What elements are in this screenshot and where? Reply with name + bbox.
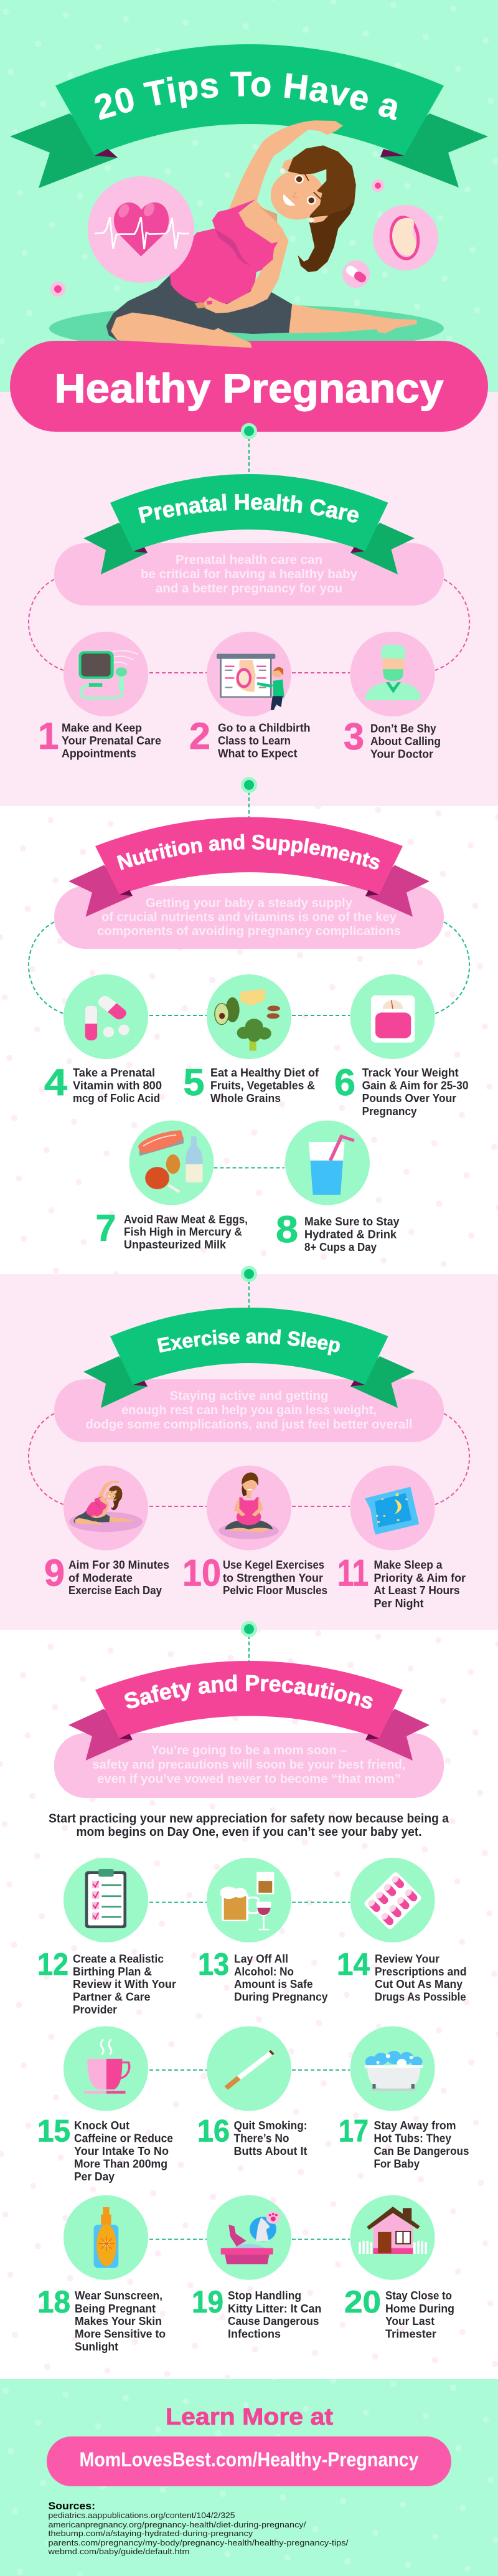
icon: checklist clipboard xyxy=(63,1858,148,1942)
number 7: 7 xyxy=(96,1207,116,1248)
tip 2 text xyxy=(218,721,310,760)
number 20: 20 xyxy=(344,2284,381,2319)
tip 11 text: Make Sleep a xyxy=(374,1559,443,1571)
tip 5 text: Whole Grains xyxy=(210,1092,281,1105)
description pill xyxy=(54,543,444,606)
tip 12 text xyxy=(73,1952,176,2016)
tip 9 text: Aim For 30 Minutes xyxy=(68,1559,169,1571)
number 15: 15 xyxy=(37,2113,70,2148)
tip 6 xyxy=(334,1062,469,1118)
description pill: and a better pregnancy for you xyxy=(156,582,342,596)
ribbon heading: Exercise and Sleep xyxy=(157,1329,340,1356)
ribbon heading xyxy=(68,1661,430,1761)
number 12: 12 xyxy=(37,1947,68,1982)
tip 2 text: Go to a Childbirth xyxy=(218,721,310,734)
tip 6 text: Track Your Weight xyxy=(362,1067,459,1079)
tip 8 xyxy=(276,1209,400,1253)
description pill: Staying active and getting xyxy=(169,1389,329,1403)
tip 6 text: Gain & Aim for 25-30 xyxy=(362,1080,469,1092)
sources: thebump.com/a/staying-hydrated-during-pregnancy xyxy=(49,2529,253,2538)
number 16: 16 xyxy=(197,2113,230,2148)
icon: weight scale xyxy=(350,974,435,1059)
tip 7 xyxy=(96,1207,248,1251)
intro text: mom begins on Day One, even if you can’t see your baby yet. xyxy=(76,1825,422,1839)
tip 17 text: Can Be Dangerous xyxy=(374,2145,469,2157)
icon: cigarette xyxy=(207,2026,291,2111)
tip 18 text: Sunlight xyxy=(75,2341,118,2353)
panel: nutrition and supplements xyxy=(27,817,471,1253)
icon: childbirth class xyxy=(207,632,291,716)
tip 10 xyxy=(182,1552,327,1597)
tip 3 text: About Calling xyxy=(370,735,441,748)
panel: exercise and sleep xyxy=(27,1308,471,1610)
tip 12 text: Create a Realistic xyxy=(73,1952,164,1965)
row connectors xyxy=(149,1903,350,2240)
tip 1 text: Appointments xyxy=(62,748,136,760)
icon: sunscreen bottle xyxy=(63,2195,148,2280)
tip 5 text: Eat a Healthy Diet of xyxy=(210,1067,319,1079)
tip 13 text: Lay Off All xyxy=(234,1952,288,1965)
ribbon heading xyxy=(83,474,415,574)
tip 13 text xyxy=(234,1952,327,2003)
tip 13 xyxy=(198,1947,327,2003)
tip 5 text xyxy=(210,1067,319,1105)
description pill: You’re going to be a mom soon – xyxy=(151,1744,347,1757)
tip 14 text: Drugs As Possible xyxy=(375,1991,466,2003)
icon: stretching woman xyxy=(63,1465,148,1550)
icon: healthy foods xyxy=(207,974,291,1059)
tip 19 text: Stop Handling xyxy=(228,2289,301,2302)
tip 1 text: Your Prenatal Care xyxy=(62,734,161,747)
number 8: 8 xyxy=(276,1209,298,1250)
icon: house xyxy=(350,2195,435,2280)
heart monitor bubble xyxy=(88,176,194,283)
ribbon heading: Prenatal Health Care xyxy=(138,493,359,523)
tip 4 text xyxy=(73,1067,162,1105)
icon: doctor xyxy=(350,632,435,716)
sources xyxy=(47,2500,349,2556)
yoga mat xyxy=(49,305,444,352)
tip 1 xyxy=(38,715,161,760)
tip 18 text: Makes Your Skin xyxy=(75,2315,162,2327)
tip 15 text: Knock Out xyxy=(74,2119,129,2132)
tip 10 text: Pelvic Floor Muscles xyxy=(223,1584,327,1597)
ring connector xyxy=(29,1414,469,1506)
tip 16 text xyxy=(234,2119,308,2157)
tip 12 text: Partner & Care xyxy=(73,1991,151,2003)
tip 10 text xyxy=(223,1559,327,1597)
tip 11 text: Per Night xyxy=(374,1597,423,1610)
embryo bubble xyxy=(373,205,438,270)
tip 20 text: Home During xyxy=(385,2303,454,2315)
number 19: 19 xyxy=(192,2284,223,2319)
tip 3 text: Your Doctor xyxy=(370,748,433,760)
ribbon heading: Nutrition and Supplements xyxy=(117,834,380,870)
tip 3 text xyxy=(370,722,441,760)
intro text xyxy=(49,1812,449,1839)
tip 7 text: Fish High in Mercury & xyxy=(124,1226,242,1238)
tip 7 text: Unpasteurized Milk xyxy=(124,1238,227,1251)
tip 14 text xyxy=(375,1952,467,2003)
sources: webmd.com/baby/guide/default.htm xyxy=(47,2547,189,2556)
tip 15 text: Per Day xyxy=(74,2170,115,2183)
tip 9 text xyxy=(68,1559,169,1597)
tip 8 text: 8+ Cups a Day xyxy=(304,1241,377,1253)
tip 15 text xyxy=(74,2119,173,2183)
connector dot one xyxy=(241,423,257,474)
pill bubble xyxy=(342,260,370,288)
tip 19 text: Infections xyxy=(228,2327,281,2340)
tip 14 text: Prescriptions and xyxy=(375,1965,467,1978)
tip 1 text: Make and Keep xyxy=(62,721,142,734)
tip 17 text: Hot Tubs: They xyxy=(374,2132,451,2144)
tip 12 text: Birthing Plan & xyxy=(73,1965,152,1978)
tip 20 text: Your Last xyxy=(385,2315,435,2327)
description pill xyxy=(54,1733,444,1798)
tip 5 xyxy=(183,1062,319,1105)
description pill: Prenatal health care can xyxy=(176,553,322,567)
description pill: safety and precautions will soon be your best friend, xyxy=(92,1758,406,1772)
icon: kitty litter xyxy=(207,2195,291,2280)
ribbon heading: Safety and Precautions xyxy=(125,1675,373,1709)
tip 18 text: Being Pregnant xyxy=(75,2303,156,2315)
tip 19 xyxy=(192,2284,321,2340)
number 17: 17 xyxy=(339,2113,369,2148)
icon: bubble bath xyxy=(350,2026,435,2111)
panel: prenatal health care xyxy=(27,474,471,760)
tip 11 xyxy=(337,1552,466,1610)
tip 14 text: Cut Out As Many xyxy=(375,1978,463,1990)
tip 4 text: Vitamin with 800 xyxy=(73,1080,162,1092)
tip 19 text xyxy=(228,2289,321,2340)
tip 9 xyxy=(44,1552,169,1597)
tip 6 text: Pregnancy xyxy=(362,1105,417,1118)
tip 12 xyxy=(37,1947,176,2016)
tip 8 text: Hydrated & Drink xyxy=(304,1229,397,1241)
tip 13 text: Amount is Safe xyxy=(234,1978,312,1990)
website pill xyxy=(47,2436,451,2486)
number 2: 2 xyxy=(189,715,210,757)
tip 7 text: Avoid Raw Meat & Eggs, xyxy=(124,1213,248,1225)
tip 16 text: There’s No xyxy=(234,2132,289,2144)
tip 11 text: Priority & Aim for xyxy=(374,1572,466,1584)
tip 11 text xyxy=(374,1559,466,1610)
tip 17 text: Stay Away from xyxy=(374,2119,456,2132)
icon: ultrasound machine xyxy=(63,632,148,716)
tip 6 text: Pounds Over Your xyxy=(362,1092,456,1105)
tip 8 text: Make Sure to Stay xyxy=(304,1215,400,1228)
sources: americanpregnancy.org/pregnancy-health/diet-during-pregnancy/ xyxy=(49,2520,306,2529)
tip 1 text xyxy=(62,721,161,760)
tip 16 xyxy=(197,2113,308,2157)
number 18: 18 xyxy=(37,2284,70,2319)
tip 15 text: More Than 200mg xyxy=(74,2158,167,2170)
tip 15 text: Caffeine or Reduce xyxy=(74,2132,173,2144)
tip 11 text: At Least 7 Hours xyxy=(374,1584,459,1597)
number 4: 4 xyxy=(44,1062,68,1103)
icon: starry pillow xyxy=(350,1465,435,1550)
icon: blister pack xyxy=(350,1858,435,1942)
tip 20 xyxy=(344,2284,454,2340)
tip 4 xyxy=(44,1062,162,1105)
tip 2 text: Class to Learn xyxy=(218,734,291,747)
tip 19 text: Cause Dangerous xyxy=(228,2315,319,2327)
tip 18 text xyxy=(75,2289,166,2353)
tip 18 text: Wear Sunscreen, xyxy=(75,2289,162,2302)
tip 7 text xyxy=(124,1213,248,1251)
tip 9 text: of Moderate xyxy=(68,1572,133,1584)
tip 12 text: Provider xyxy=(73,2003,117,2016)
hero header xyxy=(10,44,488,432)
number 1: 1 xyxy=(38,715,59,757)
pregnant woman stretching xyxy=(106,120,417,348)
icon: foods to avoid xyxy=(129,1120,214,1205)
learn more heading: Learn More at xyxy=(166,2404,333,2430)
ribbon heading xyxy=(68,817,430,917)
description pill xyxy=(54,886,444,949)
tip 2 xyxy=(189,715,310,760)
sources: parents.com/pregnancy/my-body/pregnancy-health/healthy-pregnancy-tips/ xyxy=(49,2538,349,2547)
tip 20 text: Stay Close to xyxy=(385,2289,452,2302)
tip 19 text: Kitty Litter: It Can xyxy=(228,2303,321,2315)
title ribbon xyxy=(10,44,488,188)
tip 6 text xyxy=(362,1067,469,1118)
tip 3 xyxy=(344,716,441,760)
icon: seated woman xyxy=(207,1465,291,1550)
description pill: components of avoiding pregnancy complications xyxy=(97,924,401,938)
sources: Sources: xyxy=(49,2500,95,2512)
number 11: 11 xyxy=(337,1552,369,1594)
description pill: dodge some complications, and just feel better overall xyxy=(86,1418,412,1432)
number 6: 6 xyxy=(334,1062,355,1103)
tip 13 text: During Pregnancy xyxy=(234,1991,327,2003)
small accent dots xyxy=(50,179,384,297)
connector dot four xyxy=(241,1621,257,1661)
tip 8 text xyxy=(304,1215,400,1253)
tip 15 text: Your Intake To No xyxy=(74,2145,169,2157)
title line one: 20 Tips To Have a xyxy=(95,71,397,120)
tip 2 text: What to Expect xyxy=(218,748,298,760)
description pill: of crucial nutrients and vitamins is one of the key xyxy=(101,911,397,924)
ring connector xyxy=(29,579,469,673)
icon: coffee cup xyxy=(63,2026,148,2111)
panel: safety and precautions xyxy=(37,1661,469,2353)
ribbon heading xyxy=(83,1308,415,1408)
tip 14 text: Review Your xyxy=(375,1952,439,1965)
number 5: 5 xyxy=(183,1062,204,1103)
title pill xyxy=(10,341,488,432)
tip 5 text: Fruits, Vegetables & xyxy=(210,1080,315,1092)
connector dot three xyxy=(241,1266,257,1308)
tip 15 xyxy=(37,2113,173,2183)
icon: glass of water xyxy=(285,1120,370,1205)
sources: pediatrics.aappublications.org/content/104/2/325 xyxy=(49,2511,235,2520)
title line two: Healthy Pregnancy xyxy=(55,365,444,411)
tip 4 text: Take a Prenatal xyxy=(73,1067,155,1079)
icon: alcoholic drinks xyxy=(207,1858,291,1942)
description pill: Getting your baby a steady supply xyxy=(146,896,353,910)
tip 17 text xyxy=(374,2119,469,2170)
website pill: MomLovesBest.com/Healthy-Pregnancy xyxy=(80,2448,419,2471)
tip 14 xyxy=(337,1947,467,2003)
ring connector xyxy=(29,922,469,1167)
icon: vitamin capsules xyxy=(63,974,148,1059)
intro text: Start practicing your new appreciation for safety now because being a xyxy=(49,1812,449,1825)
tip 13 text: Alcohol: No xyxy=(234,1965,294,1978)
tip 20 text xyxy=(385,2289,454,2340)
number 3: 3 xyxy=(344,716,364,758)
panel: footer xyxy=(47,2404,451,2556)
number 14: 14 xyxy=(337,1947,370,1982)
number 13: 13 xyxy=(198,1947,229,1982)
tip 9 text: Exercise Each Day xyxy=(68,1584,162,1597)
tip 16 text: Quit Smoking: xyxy=(234,2119,308,2132)
tip 20 text: Trimester xyxy=(385,2327,436,2340)
tip 12 text: Review it With Your xyxy=(73,1978,176,1990)
description pill xyxy=(54,1379,444,1442)
number 10: 10 xyxy=(182,1552,221,1594)
tip 10 text: to Strengthen Your xyxy=(223,1572,323,1584)
tip 17 xyxy=(339,2113,469,2170)
tip 18 text: More Sensitive to xyxy=(75,2327,166,2340)
number 9: 9 xyxy=(44,1552,65,1594)
tip 3 text: Don’t Be Shy xyxy=(370,722,436,734)
connector dot two xyxy=(241,777,257,817)
tip 18 xyxy=(37,2284,166,2353)
tip 17 text: For Baby xyxy=(374,2158,420,2170)
tip 16 text: Butts About It xyxy=(234,2145,308,2157)
description pill: be critical for having a healthy baby xyxy=(141,568,358,581)
description pill: enough rest can help you gain less weight, xyxy=(121,1404,377,1417)
description pill: even if you’ve vowed never to become “that mom” xyxy=(97,1772,401,1786)
tip 4 text: mcg of Folic Acid xyxy=(73,1092,160,1105)
tip 10 text: Use Kegel Exercises xyxy=(223,1559,324,1571)
